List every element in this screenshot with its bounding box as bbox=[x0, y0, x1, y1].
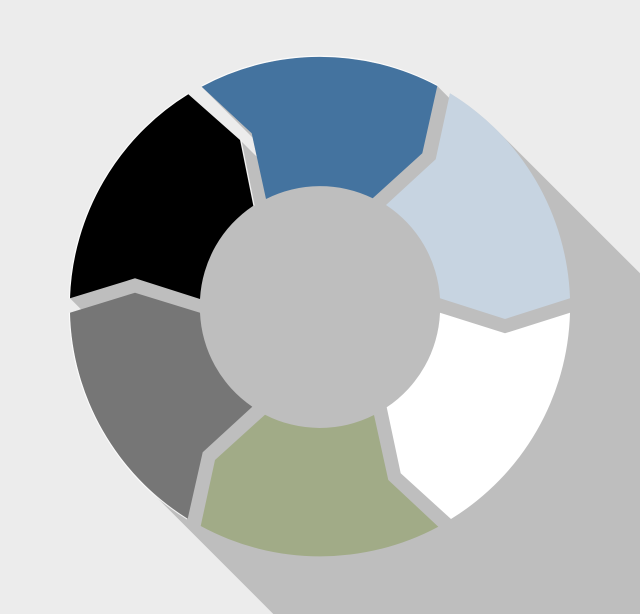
gap: between black and gray segments bbox=[60, 298, 81, 313]
gap: between black and blue segments bbox=[180, 75, 257, 157]
segment: green bbox=[201, 415, 438, 556]
segment: light blue bbox=[386, 93, 570, 319]
gap: between blue and light blue segments bbox=[437, 75, 460, 98]
centre circle bbox=[200, 187, 440, 427]
segment: black bbox=[70, 94, 253, 299]
segment: white bbox=[387, 313, 570, 519]
segment: gray bbox=[70, 293, 252, 519]
edge highlights bbox=[69, 56, 437, 519]
segment: blue bbox=[202, 57, 437, 199]
